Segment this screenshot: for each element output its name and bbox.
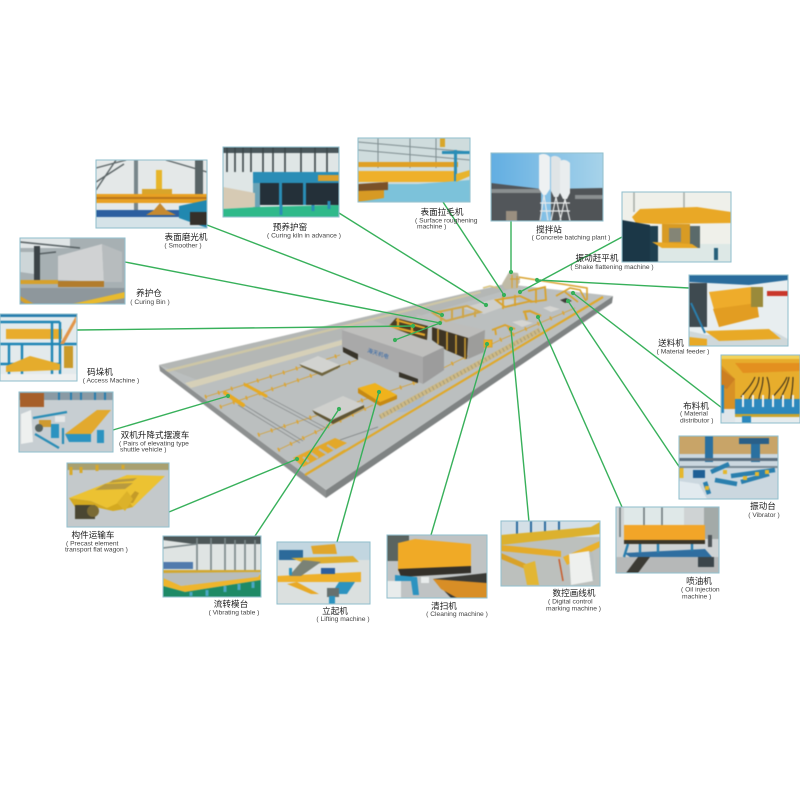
leader: material feeder	[535, 278, 689, 288]
label: cleaning machine: ( Cleaning machine )	[426, 611, 488, 618]
leader: curing kiln	[339, 213, 488, 307]
label: elevating shuttle	[119, 429, 190, 454]
label: curing bin	[130, 287, 170, 306]
label: precast wagon: 构件运输车	[72, 529, 115, 540]
label: vibrating table: ( Vibrating table )	[209, 610, 259, 616]
label: lifting machine	[316, 605, 370, 623]
photo: precast wagon	[68, 464, 168, 526]
upper kiln frame	[433, 306, 480, 322]
label: elevating shuttle: shuttle vehicle )	[120, 446, 166, 454]
leader: vibrating table	[255, 407, 341, 536]
panel: vibrator	[679, 436, 780, 519]
label: batching plant: ( Concrete batching plant )	[532, 234, 610, 242]
panel: surface roughening	[358, 138, 478, 230]
photo: elevating shuttle	[20, 392, 112, 452]
yellow transfer cart	[358, 383, 397, 406]
photo: batching plant	[492, 154, 602, 220]
photo: vibrator	[680, 436, 778, 498]
yellow beams	[225, 385, 266, 405]
panel: precast element transport wagon	[65, 463, 169, 554]
platform slab	[159, 284, 613, 498]
photo: access machine	[0, 314, 76, 380]
label: vibrator	[748, 500, 780, 519]
leader: curing bin	[125, 262, 442, 342]
photo: oil injection	[616, 508, 718, 572]
photo: curing kiln	[224, 148, 338, 216]
label: access machine	[83, 366, 139, 384]
label: material feeder	[657, 337, 709, 356]
label: surface roughening: machine )	[417, 224, 446, 230]
label: digital marking: 数控画线机	[553, 587, 596, 598]
label: oil injection: 喷油机	[686, 575, 712, 586]
curing kiln building	[415, 314, 485, 359]
label: material feeder: 送料机	[658, 337, 684, 348]
leader: surface roughening	[443, 202, 506, 297]
panel: material distributor	[680, 355, 800, 424]
precast slabs	[299, 298, 572, 424]
photo: smoother	[96, 160, 206, 228]
leader: vibrator	[566, 299, 680, 468]
label: vibrating table	[209, 598, 259, 616]
label: cleaning machine	[426, 600, 488, 618]
leader: precast wagon	[169, 457, 299, 512]
leader: lifting machine	[337, 390, 381, 542]
label: digital marking: marking machine )	[546, 606, 601, 612]
label: oil injection: ( Oil injection	[681, 586, 720, 594]
photo: surface roughening	[358, 138, 470, 202]
panel: concrete batching plant	[491, 153, 610, 242]
leader: smoother	[207, 225, 444, 317]
label: oil injection: machine )	[682, 594, 711, 600]
label: curing kiln: 预养护窑	[273, 221, 308, 232]
panel: vibrating table	[163, 536, 261, 616]
panel: curing bin	[20, 238, 170, 306]
tracks and sleepers	[205, 308, 575, 450]
label: lifting machine: 立起机	[322, 605, 348, 616]
label: precast wagon: transport flat wagon )	[65, 546, 128, 554]
panel: oil injection machine	[616, 507, 720, 600]
panel: lifting machine	[277, 542, 370, 623]
label: batching plant: 搅拌站	[536, 224, 562, 234]
label: shake flattening: ( Shake flattening machine )	[570, 264, 654, 271]
label: elevating shuttle: 双机升降式摆渡车	[121, 429, 190, 440]
leader lines	[77, 202, 722, 542]
access machine frame	[387, 318, 428, 340]
panel: shake flattening machine	[570, 192, 731, 271]
label: curing bin: 养护仓	[136, 287, 162, 298]
label: surface roughening	[415, 206, 478, 230]
leader: elevating shuttle	[113, 394, 230, 430]
photo: cleaning machine	[388, 536, 486, 598]
photo: shake flattening	[622, 192, 730, 262]
label: vibrator: ( Vibrator )	[748, 512, 780, 519]
label: curing bin: ( Curing Bin )	[130, 299, 170, 306]
label: surface roughening: ( Surface roughening	[415, 218, 478, 224]
label: shake flattening: 振动赶平机	[576, 252, 619, 263]
label: smoother: ( Smoother )	[164, 242, 202, 250]
label: material distributor: ( Material	[680, 410, 708, 418]
leader: oil injection	[536, 315, 622, 507]
label: surface roughening: 表面拉毛机	[421, 206, 464, 217]
label: material distributor: 布料机	[683, 400, 709, 411]
leader: digital marking	[509, 327, 529, 522]
label: material distributor: distributor )	[680, 418, 713, 424]
photo: curing bin	[20, 238, 124, 304]
concrete batching model	[502, 272, 520, 289]
label: vibrating table: 流转模台	[214, 598, 248, 609]
label: precast wagon	[65, 529, 128, 554]
panel: digital control marking machine	[501, 521, 601, 612]
factory platform model	[159, 272, 613, 498]
leader: access machine	[77, 324, 415, 330]
label: curing kiln: ( Curing kiln in advance )	[267, 232, 341, 240]
panel: elevating shuttle vehicle	[19, 392, 190, 454]
photo: digital marking	[502, 522, 600, 586]
label: lifting machine: ( Lifting machine )	[316, 616, 370, 623]
label: curing kiln	[267, 221, 341, 240]
leader: batching plant	[509, 220, 513, 274]
label: access machine: 码垛机	[87, 366, 113, 377]
label: elevating shuttle: ( Pairs of elevating type	[119, 440, 189, 448]
panel: curing kiln in advance	[223, 147, 341, 240]
upper production machines	[483, 277, 587, 347]
label: smoother	[164, 231, 208, 250]
label: batching plant	[532, 224, 610, 242]
panel: material feeder	[657, 275, 788, 356]
photo: lifting machine	[278, 542, 370, 604]
photo: vibrating table	[164, 536, 260, 596]
label: precast wagon: ( Precast element	[66, 540, 119, 548]
long rack	[380, 330, 540, 417]
panel: cleaning machine	[387, 535, 488, 618]
photo: material distributor	[722, 356, 800, 422]
long yellow rail	[305, 297, 603, 475]
label: oil injection	[681, 575, 720, 600]
label: material feeder: ( Material feeder )	[657, 348, 709, 356]
label: digital marking: ( Digital control	[548, 598, 593, 606]
leader: material distributor	[571, 291, 722, 408]
label: access machine: ( Access Machine )	[83, 378, 139, 384]
label: digital marking	[546, 587, 601, 612]
label: smoother: 表面磨光机	[165, 231, 208, 242]
panel: access machine	[0, 314, 139, 384]
curing bin building: 海天机电	[366, 346, 390, 361]
frame wagon	[293, 438, 347, 474]
label: cleaning machine: 清扫机	[431, 600, 457, 611]
panel: smoother	[96, 160, 208, 250]
leader: shake flattening	[518, 237, 622, 294]
photo: material feeder	[690, 276, 788, 346]
label: vibrator: 振动台	[750, 500, 776, 511]
label: material distributor	[680, 400, 713, 424]
curing bin building	[342, 320, 444, 384]
label: shake flattening	[570, 252, 654, 271]
leader: cleaning machine	[431, 342, 489, 535]
